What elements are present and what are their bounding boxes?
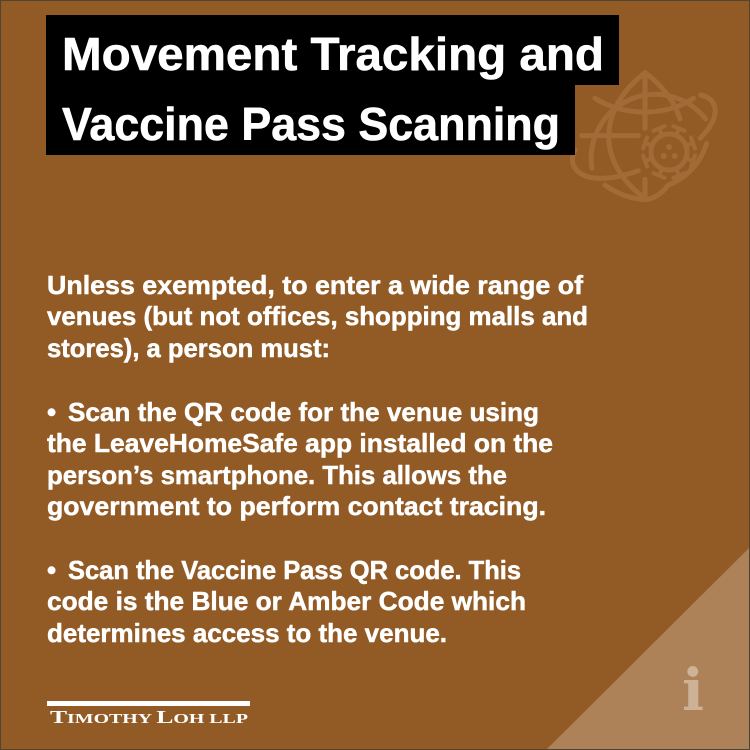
text block: first bullet: government to perform contact tracing. [47, 491, 546, 521]
logo: Timothy Loh LLP [47, 701, 250, 727]
text block: introduction [47, 270, 588, 363]
corner triangle [547, 548, 749, 749]
text block: second bullet [47, 555, 526, 648]
text block: introduction: venues (but not offices, shopping malls and [47, 301, 588, 331]
logo: Timothy Loh LLP: T IMOTHY L OH LLP [50, 707, 249, 727]
text block: introduction: Unless exempted, to enter a wide range of [47, 270, 583, 300]
text block: first bullet: the LeaveHomeSafe app installed on the [47, 428, 553, 458]
text block: second bullet: Scan the Vaccine Pass QR code. This [68, 555, 521, 585]
text block: second bullet: code is the Blue or Amber Code which [47, 586, 526, 616]
text block: first bullet [47, 397, 553, 521]
title line 2: Vaccine Pass Scanning [62, 98, 560, 150]
title box line 2 [46, 85, 575, 155]
text block: first bullet: Scan the QR code for the venue using [68, 397, 539, 427]
text block: first bullet: person’s smartphone. This allows the [47, 460, 507, 490]
text block: introduction: stores), a person must: [47, 333, 330, 363]
icon: globe with virus [572, 73, 715, 200]
text block: second bullet: • [47, 555, 56, 585]
text block: second bullet: determines access to the venue. [47, 618, 447, 648]
title [46, 15, 619, 155]
text block: first bullet: • [47, 397, 56, 427]
title line 1: Movement Tracking and [62, 28, 604, 80]
icon: info letter: i [682, 656, 704, 724]
title box line 1 [46, 15, 619, 85]
